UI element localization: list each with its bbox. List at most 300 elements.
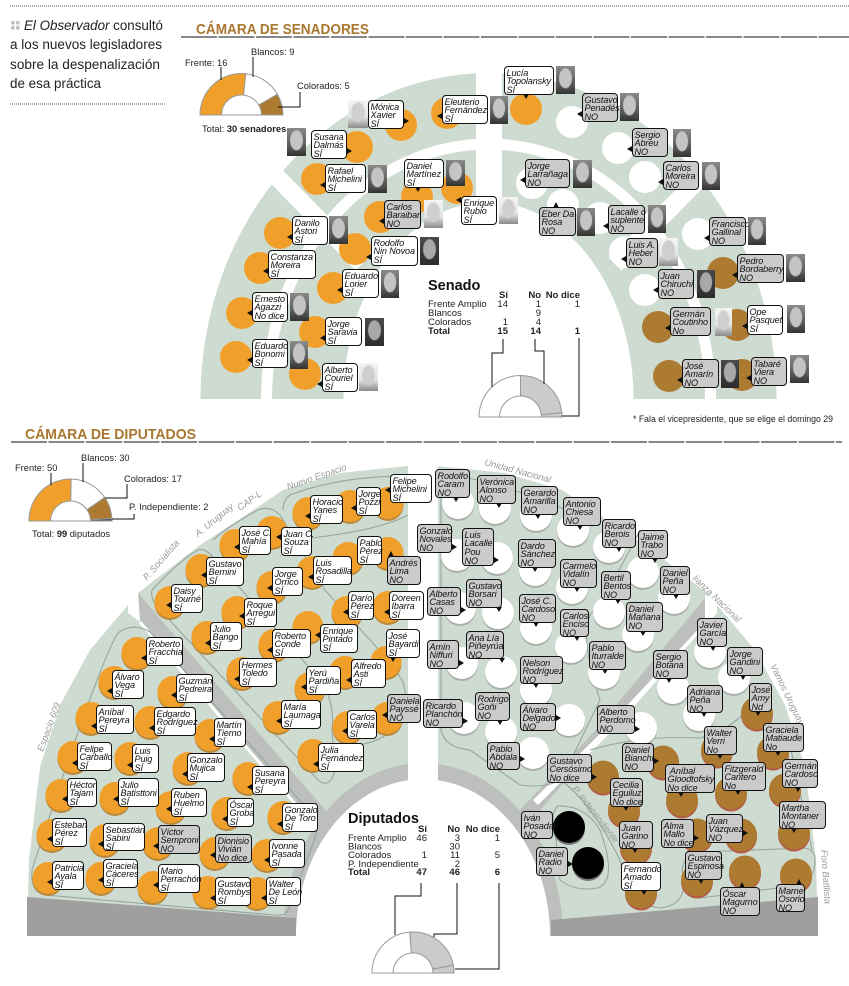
bubble: José Bayardi: José: [388, 630, 407, 640]
bubble: Hermes Toledo: Hermes: [242, 660, 273, 670]
bubble: Verónica Alonso: NO: [480, 494, 493, 504]
photo: Jorge Larrañaga: [573, 160, 592, 188]
bubble: Ope Pasquet: Ope: [750, 306, 766, 316]
bubble: Nelson Rodríguez: Rodríguez: [522, 666, 563, 676]
bubble: Susana Dalmás: [311, 130, 347, 159]
composition semicircle chart: [29, 479, 112, 521]
photo: Francisco Gallinal: [748, 217, 766, 245]
bubble: Carlos Moreira: NO: [666, 180, 679, 190]
bubble: Jorge Orrico: [272, 567, 303, 596]
bubble: Luis A. Heber: [626, 238, 658, 268]
bubble: Luis Puig: Puig: [134, 754, 152, 764]
bubble: Susana Pereyra: [252, 766, 289, 795]
deputies table: 1: [495, 833, 500, 844]
bubble: Fitzgerald Cantero: Fitzgerald: [724, 764, 763, 774]
bubble: Óscar Magurno: Magurno: [722, 897, 758, 907]
bubble: Daniela Payssé: Payssé: [390, 704, 419, 714]
bubble: Amín Niffuri: Niffuri: [430, 650, 452, 660]
bubble: Jorge Pozzi: Jorge: [358, 488, 381, 498]
bubble: Doreen Ibarra: Ibarra: [392, 601, 415, 611]
heading: Cámara de Senadores: CÁMARA DE SENADORES: [196, 21, 369, 38]
bubble: Jorge Pozzi: [356, 487, 381, 516]
bubble: Amín Niffuri: [427, 640, 459, 669]
bubble: Ernesto Agazzi: No dice: [254, 311, 284, 321]
bubble: Gustavo Penadés: NO: [584, 112, 598, 122]
bubble: Gustavo Borsari: Borsari: [468, 589, 496, 599]
bubble: Rodolfo Nin Novoa: Rodolfo: [374, 238, 404, 248]
bubble: Horacio Yanes: SÍ: [312, 514, 321, 524]
bubble: Julia Fernández: [318, 743, 364, 772]
bubble: Daniel Martínez: Daniel: [406, 160, 432, 170]
bubble: Yerú Pardiña: Yerú: [308, 668, 327, 678]
senate chamber chart: [181, 20, 849, 424]
composition labels: P. Independiente: 2: [129, 502, 208, 512]
bubble: Doreen Ibarra: Doreen: [392, 592, 421, 602]
photo: Lucía Topolansky: [556, 66, 575, 94]
senate table: Blancos: [428, 308, 462, 319]
bubble: Daniel Bianchi: Bianchi: [624, 753, 654, 763]
bubble: Jorge Gandini: Gandini: [730, 657, 760, 667]
bubble: Alberto Casas: NO: [430, 606, 443, 616]
bubble: Daisy Tourné: Tourné: [174, 594, 201, 604]
bubble: Juan C. Souza: SÍ: [284, 546, 292, 556]
photo: Alberto Couriel: [359, 363, 378, 391]
bubble: Álvaro Delgado: Álvaro: [522, 704, 548, 714]
faction labels: Unidad Nacional: [483, 457, 553, 485]
bubble: Gustavo Borsari: [466, 579, 502, 608]
bubble: Alfredo Asti: [351, 659, 386, 688]
bubble: Jorge Saravia: Jorge: [328, 318, 350, 328]
senate table: 15: [497, 326, 509, 337]
bubble: Ricardo Planchón: [423, 699, 463, 728]
bubble: Jorge Saravia: Saravia: [328, 327, 358, 337]
photo: Luis A. Heber: [659, 238, 678, 266]
deputies table: 47: [416, 867, 427, 878]
photo: Eber Da Rosa: [577, 208, 595, 236]
bubble: Daniel Radio: Daniel: [538, 848, 564, 858]
bubble: Enrique Rubio: [461, 196, 497, 225]
deputies table: Total: [348, 867, 370, 878]
bubble: María Laumaga: María: [284, 702, 306, 712]
senate table: Sí: [499, 290, 508, 301]
bubble: Rodrigo Goñi: NO: [478, 711, 491, 721]
bubble: Luis A. Heber: Luis A.: [628, 240, 655, 250]
bubble: Edgardo Rodríguez: SÍ: [156, 726, 165, 736]
faction labels: A. Uruguay: [192, 501, 236, 539]
bubble: Jorge Larrañaga: Larrañaga: [528, 169, 568, 179]
bubble: Mario Perrachón: SÍ: [160, 883, 169, 893]
bubble: Walter De León: Walter: [268, 878, 294, 888]
bubble: Patricia Ayala: Ayala: [54, 871, 77, 881]
bubble: Graciela Cáceres: Cáceres: [106, 869, 139, 879]
bubble: Pablo Iturralde: Iturralde: [592, 651, 624, 661]
bubble: Álvaro Delgado: NO: [522, 722, 536, 732]
bubble: Roberto Fracchia: SÍ: [148, 656, 157, 666]
bubble: Cecilia Eguiluz: Eguiluz: [612, 788, 642, 798]
bubble: Eduardo Lorier: Lorier: [344, 279, 367, 289]
bubble: Alma Mallo: No dice: [664, 838, 694, 848]
bubble: Dionisio Vivián: [215, 834, 252, 863]
bubble: Iván Posada: Posada: [524, 821, 554, 831]
senate table: Total: [428, 326, 450, 337]
bubble: Ana Lía Piñeyrúa: Piñeyrúa: [468, 641, 503, 651]
bubble: José C. Cardoso: José C.: [522, 596, 552, 606]
bubble: Constanza Moreira: [268, 250, 316, 279]
photo: Carlos Baraibar: [424, 200, 443, 228]
bubble: Pablo Iturralde: [589, 641, 626, 670]
bubble: Ricardo Berois: Berois: [604, 529, 630, 539]
bubble: Verónica Alonso: Alonso: [480, 485, 507, 495]
photo: Rafael Michelini: [368, 165, 387, 193]
bubble: Daniel Bianchi: [622, 743, 654, 772]
bubble: Eleuterio Fernández: Eleuterio: [444, 96, 479, 106]
bubble: Héctor Tajam: [67, 778, 97, 807]
bubble: Fitzgerald Cantero: Cantero: [724, 772, 756, 782]
bubble: Cecilia Eguiluz: No dice: [612, 797, 642, 807]
photo: Eduardo Lorier: [381, 270, 399, 298]
bubble: Gustavo Bernini: Gustavo: [208, 558, 242, 568]
bubble: Jorge Saravia: [325, 317, 362, 346]
bubble: Carlos Enciso: [560, 609, 589, 637]
bubble: Gustavo Espinosa: Gustavo: [688, 852, 721, 862]
bubble: Marne Osorio: Osorio: [778, 894, 805, 904]
deputies table: 2: [455, 859, 460, 870]
bubble: Daniela Payssé: NO: [390, 713, 403, 723]
chamber floor: [27, 460, 818, 936]
photo: Ernesto Agazzi: [290, 293, 309, 321]
bubble: Juan Chiruchi: Chiruchi: [660, 279, 693, 289]
composition labels: [185, 47, 350, 134]
bubble: Luis Puig: [132, 744, 159, 773]
bubble: Aníbal Gloodtofsky: No dice: [668, 783, 698, 793]
bubble: Eduardo Bonomi: Bonomi: [254, 349, 285, 359]
bubble: Jorge Gandini: Jorge: [730, 648, 752, 658]
bubble: Alberto Casas: Alberto: [430, 588, 457, 598]
bubble: Walter Verri: Verri: [706, 736, 725, 746]
bubble: Ernesto Agazzi: [252, 292, 288, 322]
bubble: Javier García: NO: [700, 637, 713, 647]
bubble: Dionisio Vivián: No dice: [218, 853, 248, 863]
bubble: Alma Mallo: Mallo: [664, 829, 685, 839]
bubble: José C. Cardoso: [519, 594, 556, 623]
bubble: Gerardo Amarilla: Amarilla: [524, 496, 555, 506]
bubble: Rodolfo Nin Novoa: [371, 236, 418, 266]
bubble: Daisy Tourné: [171, 584, 203, 613]
bubble: Alma Mallo: [661, 819, 694, 848]
bubble: Amín Niffuri: Amín: [430, 642, 450, 652]
bubble: Juan C. Souza: [281, 527, 312, 556]
bubble: José C. Cardoso: Cardoso: [522, 604, 555, 614]
bubble: Graciela Matiaude: Matiaude: [766, 733, 802, 743]
bubble: Adriana Peña: Adriana: [690, 686, 720, 696]
bubble: Sebastián Sabini: Sebastián: [106, 824, 145, 834]
bubble: Andrés Lima: Lima: [390, 566, 409, 576]
bubble: Pablo Abdala: NO: [490, 761, 503, 771]
composition labels: Frente: 50: [15, 463, 57, 473]
seats: Blancos: [441, 487, 750, 771]
bubble: Juan Garino: Juan: [622, 822, 641, 832]
bubble: Pablo Abdala: [487, 742, 520, 770]
bubble: Alberto Couriel: SÍ: [324, 382, 333, 392]
bubble: José Bayardi: [386, 629, 420, 658]
bubble: Ernesto Agazzi: Agazzi: [254, 302, 281, 312]
bubble: Felipe Michelini: SÍ: [392, 493, 401, 503]
bubble: Gustavo Bernini: Bernini: [208, 567, 236, 577]
bubble: José C. Mahía: [239, 526, 271, 555]
composition labels: Frente: 16: [185, 58, 227, 68]
bubble: Gustavo Rombys: [215, 877, 251, 906]
bubble: Andrés Lima: NO: [390, 575, 403, 585]
senate vote semicircle: [479, 376, 562, 417]
bubble: Daniel Bianchi: NO: [624, 762, 638, 772]
bubble: Martha Montaner: Martha: [782, 802, 809, 812]
bubble: Marne Osorio: Marne: [778, 886, 804, 896]
seats: Colorados: [587, 696, 812, 910]
bubble: Susana Pereyra: SÍ: [254, 785, 263, 795]
bubble: Lacalle o suplente: NO: [610, 224, 624, 234]
bubble: Carlos Moreira: Carlos: [666, 162, 691, 172]
seats: Frente Amplio: [32, 487, 404, 911]
bubble: Óscar Groba: [227, 798, 254, 827]
bubble: Felipe Michelini: [390, 474, 432, 503]
bubble: Alberto Couriel: [322, 363, 358, 392]
bubble: Juan Vázquez: Vázquez: [708, 824, 743, 834]
bubble: Rodrigo Goñi: Rodrigo: [478, 694, 509, 704]
bubble: Luis Lacalle Pou: NO: [464, 556, 478, 566]
bubble: Juan Garino: Garino: [622, 831, 648, 841]
bubble: Pedro Bordaberry: Pedro: [740, 256, 763, 266]
bubble: José Bayardi: Bayardi: [388, 639, 418, 649]
bubble: Aníbal Pereyra: Aníbal: [98, 706, 124, 716]
bubble: Martín Tierno: [214, 718, 246, 747]
bubble: Germán Coutinho: Coutinho: [672, 317, 708, 327]
bubble: Guzmán Pedreira: SÍ: [178, 693, 187, 703]
bubble: Aníbal Pereyra: Pereyra: [98, 715, 130, 725]
bubble: Gustavo Penadés: Gustavo: [584, 94, 618, 104]
bubble: Antonio Chiesa: Antonio: [566, 498, 596, 508]
deputies table: Frente Amplio: [348, 833, 407, 844]
bubble: Sebastián Sabini: Sabini: [106, 833, 130, 843]
bubble: Aníbal Pereyra: [96, 705, 134, 734]
bubble: Roberto Fracchia: Fracchia: [148, 647, 182, 657]
deputies table: 1: [422, 850, 427, 861]
deputies table: [348, 811, 500, 878]
bubble: Tabaré Viera: NO: [754, 376, 767, 386]
bubble: Rodolfo Caram: Caram: [438, 479, 464, 489]
bubble: Gustavo Bernini: SÍ: [208, 576, 217, 586]
bubble: Jorge Larrañaga: Jorge: [528, 160, 550, 170]
bubble: José C. Mahía: José C.: [242, 528, 272, 538]
bubble: Bertil Bentos: NO: [604, 590, 617, 600]
bubble: Rafael Michelini: Michelini: [328, 174, 362, 184]
bubble: Francisco Gallinal: NO: [712, 236, 725, 246]
photo: Danilo Astori: [329, 216, 348, 244]
bubble: Darío Pérez: Pérez: [350, 601, 374, 611]
senate table: Senado: [428, 278, 481, 294]
bubble: Danilo Astori: SÍ: [294, 235, 303, 245]
intro text: sobre la despenalización: [10, 57, 160, 72]
bubble: Enrique Pintado: [320, 624, 358, 653]
photo: Tabaré Viera: [790, 355, 809, 383]
bubble: Gustavo Espinosa: [685, 851, 722, 880]
bubble: Aníbal Gloodtofsky: [665, 764, 715, 793]
photo: Pedro Bordaberry: [786, 254, 805, 282]
bubble: Graciela Matiaude: No: [766, 742, 777, 752]
bubble: Graciela Cáceres: [103, 859, 138, 888]
deputies table: 46: [416, 833, 427, 844]
bubble: Adriana Peña: [687, 685, 723, 713]
bubble: Álvaro Vega: Vega: [114, 680, 135, 690]
chamber floor: [200, 60, 776, 405]
bubble: Gonzalo Mujica: Mujica: [190, 763, 215, 773]
bubble: Dardo Sánchez: Sánchez: [520, 549, 555, 559]
bubble: Daniel Bianchi: Daniel: [624, 744, 650, 754]
bubble: Gustavo Penadés: [582, 93, 618, 122]
bubble: Antonio Chiesa: [563, 497, 601, 526]
bubble: Luis Lacalle Pou: Pou: [464, 547, 480, 557]
bubble: Gonzalo Novales: NO: [420, 543, 433, 553]
photo: Sergio Abreu: [673, 129, 691, 157]
bubble: Martha Montaner: Montaner: [782, 811, 819, 821]
bubble: Eduardo Bonomi: [252, 339, 288, 368]
bubble: Daniela Payssé: [387, 694, 421, 723]
bubble: Rodrigo Goñi: [475, 692, 510, 721]
composition labels: Colorados: 5: [297, 81, 350, 91]
bubble: José Amarín: José: [684, 360, 703, 370]
bubble: Lucía Topolansky: Lucía: [506, 68, 528, 78]
bubble: Juan Garino: NO: [622, 840, 635, 850]
bubble: Juan Chiruchi: [658, 269, 694, 299]
photo: Gustavo Penadés: [620, 93, 639, 121]
bubble: Alberto Couriel: Alberto: [324, 364, 352, 374]
bubble: Jorge Orrico: Orrico: [274, 577, 299, 587]
bubble: Luis Puig: SÍ: [134, 763, 143, 773]
bubble: Aníbal Gloodtofsky: Aníbal: [670, 766, 695, 776]
bubble: Eleuterio Fernández: SÍ: [444, 114, 453, 124]
bubble: Mónica Xavier: Xavier: [370, 110, 396, 120]
bubble: Juan Chiruchi: NO: [660, 288, 674, 298]
bubble: Carlos Baraibar: NO: [386, 219, 400, 229]
bubble: Luis Lacalle Pou: Lacalle: [464, 538, 492, 548]
bubble: Walter De León: De León: [268, 887, 302, 897]
faction labels: P. Independiente: [570, 784, 621, 845]
bubble: Luis A. Heber: NO: [628, 257, 642, 267]
bubble: Walter Verri: [704, 726, 737, 755]
bubble: Julia Fernández: SÍ: [320, 762, 329, 772]
bubble: Francisco Gallinal: Gallinal: [712, 227, 741, 237]
footnote: * Fala el vicepresidente, que se elige el domingo 29: [633, 413, 833, 424]
bubble: Javier García: Javier: [700, 620, 723, 630]
bubble: Daniel Mañana: NO: [628, 621, 642, 631]
photo: Juan Chiruchi: [697, 270, 715, 298]
bubble: Martín Tierno: Tierno: [216, 728, 241, 738]
bubble: Ope Pasquet: Pasquet: [750, 315, 782, 325]
bubble: Ivonne Pasada: Ivonne: [272, 840, 298, 850]
bubble: Andrés Lima: [387, 556, 421, 585]
bubble: Lacalle o suplente: suplente: [610, 215, 644, 225]
bubble: Doreen Ibarra: SÍ: [392, 610, 400, 620]
bubble: Lucía Topolansky: [504, 66, 554, 95]
bubble: Pablo Pérez: [357, 536, 382, 565]
bubble: Gonzalo Novales: Gonzalo: [420, 526, 453, 536]
bubble: Dardo Sánchez: Dardo: [520, 540, 545, 550]
bubble: Víctor Semproni: NO: [160, 844, 174, 854]
bubble: Pedro Bordaberry: [737, 254, 784, 283]
bubble: Álvaro Delgado: [520, 703, 556, 731]
bubble: Darío Pérez: Darío: [350, 592, 372, 602]
bubble: Germán Cardoso: NO: [784, 778, 798, 788]
bubble: Sergio Botana: Sergio: [656, 652, 681, 662]
bubble: Lucía Topolansky: SÍ: [506, 85, 515, 95]
bubble: Eduardo Lorier: SÍ: [344, 288, 353, 298]
bubble: Daniel Peña: NO: [662, 585, 676, 595]
bubble: Álvaro Vega: [112, 670, 144, 699]
bubble: Tabaré Viera: [751, 357, 787, 386]
bubble: Gonzalo Novales: Novales: [420, 534, 452, 544]
bubble: Ricardo Planchón: Ricardo: [426, 700, 456, 710]
bubble: Pedro Bordaberry: Bordaberry: [740, 264, 783, 274]
bubble: Rodolfo Nin Novoa: SÍ: [374, 255, 382, 265]
bubble: Alberto Couriel: Couriel: [324, 373, 352, 383]
bubble: Óscar Magurno: NO: [722, 906, 736, 916]
bubble: Esteban Pérez: Pérez: [54, 828, 78, 838]
bubble: José Amarín: [682, 359, 719, 388]
senate table: Frente Amplio: [428, 299, 487, 310]
bubble: Gustavo Cersósimo: Gustavo: [550, 756, 583, 766]
bubble: Yerú Pardiña: Pardiña: [308, 676, 339, 686]
vote leader lines: [395, 883, 499, 969]
bubble: Rafael Michelini: Rafael: [328, 166, 353, 176]
bubble: Pablo Pérez: SÍ: [360, 555, 368, 565]
bubble: Luis A. Heber: Heber: [628, 248, 653, 258]
bubble: Ivonne Pasada: SÍ: [272, 858, 280, 868]
bubble: Alma Mallo: Alma: [664, 820, 684, 830]
faction labels: Foro Batllista: [819, 849, 833, 904]
bubble: Rodolfo Caram: NO: [438, 488, 451, 498]
bubble: Óscar Magurno: Óscar: [722, 888, 746, 898]
bubble: Álvaro Delgado: Delgado: [522, 713, 556, 723]
bubble: Daisy Tourné: Daisy: [174, 586, 196, 596]
bubble: Susana Dalmás: Susana: [314, 132, 344, 142]
bubble: Alberto Perdomo: Alberto: [600, 706, 627, 716]
bubble: Roberto Conde: Roberto: [274, 630, 306, 640]
bubble: Sergio Abreu: Sergio: [634, 130, 660, 140]
bubble: Pablo Iturralde: Pablo: [592, 642, 614, 652]
bubble: Pablo Abdala: Pablo: [490, 744, 512, 754]
bubble: José Bayardi: SÍ: [388, 648, 397, 658]
bubble: Jorge Pozzi: SÍ: [358, 506, 367, 516]
bubble: Germán Coutinho: Germán: [672, 308, 705, 318]
bubble: Roberto Fracchia: [146, 637, 183, 666]
bubble: María Laumaga: [281, 700, 321, 729]
bubble: Carmelo Vidalín: Vidalín: [562, 569, 589, 579]
bubble: Hermes Toledo: Toledo: [242, 668, 268, 678]
photo: Jorge Saravia: [365, 318, 384, 346]
bubble: Pablo Pérez: Pérez: [360, 546, 383, 556]
bubble: Guzmán Pedreira: Guzmán: [178, 676, 212, 686]
bubble: Martín Tierno: SÍ: [216, 737, 225, 747]
bubble: Alberto Casas: Casas: [430, 597, 455, 607]
bubble: Martha Montaner: [779, 801, 826, 829]
bubble: Rodolfo Nin Novoa: Nin Novoa: [374, 246, 415, 256]
bubble: Jorge Orrico: SÍ: [274, 586, 283, 596]
bubble: Gustavo Espinosa: Espinosa: [688, 861, 724, 871]
bubble: Enrique Rubio: SÍ: [464, 215, 472, 225]
bubble: Roque Arregui: Roque: [246, 600, 273, 610]
bubble: Yerú Pardiña: [306, 666, 341, 695]
deputies table: 11: [450, 850, 460, 861]
bubble: José Amarín: NO: [684, 378, 698, 388]
